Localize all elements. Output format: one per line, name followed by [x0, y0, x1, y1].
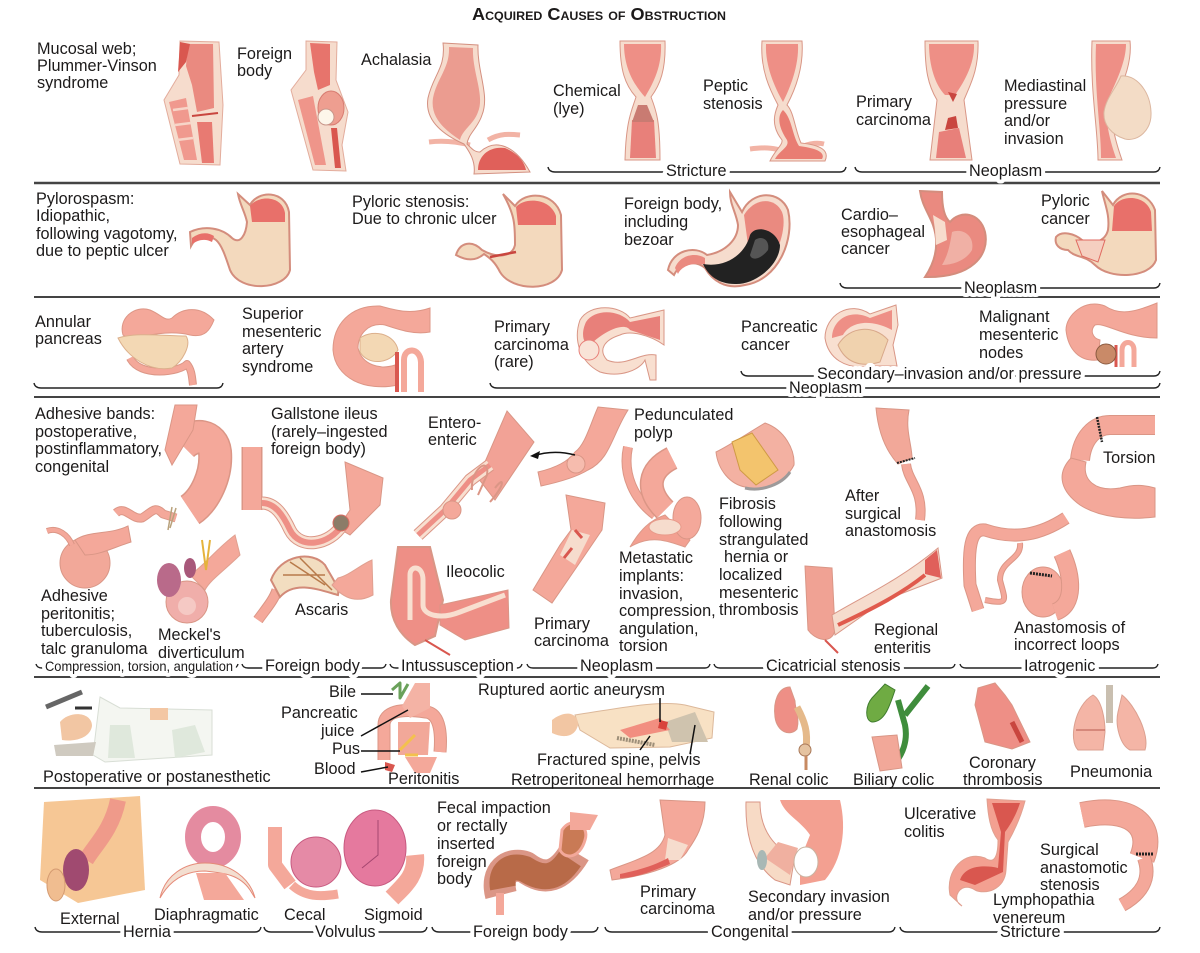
label: primary carcinoma: Primary: [856, 93, 913, 111]
label: gallstone ileus: foreign body): [271, 440, 366, 458]
bracket: neoplasm: Neoplasm: [580, 657, 653, 675]
label: metastatic implants: torsion: [619, 637, 668, 655]
illustration: primary small bowel carcinoma: [533, 495, 605, 603]
bracket: neoplasm: Neoplasm: [969, 162, 1042, 180]
illustration: malignant mesenteric nodes: [1066, 303, 1157, 367]
illustration: cecal volvulus: [275, 827, 341, 896]
label: adhesive peritonitis: Adhesive: [41, 587, 108, 605]
illustration: entero-enteric intussusception: [418, 411, 534, 535]
illustration: secondary invasion pelvis: [746, 800, 843, 885]
label: cecal: Cecal: [284, 906, 326, 924]
label: SMA syndrome: [242, 305, 321, 376]
label: surgical anastomotic stenosis: [1040, 841, 1128, 894]
label: adhesive peritonitis: talc granuloma: [41, 640, 149, 658]
label: lymphopathia venereum: venereum: [993, 909, 1065, 927]
label: malignant nodes: Malignant: [979, 308, 1050, 326]
illustration: heart: [975, 683, 1030, 749]
label: diaphragmatic: Diaphragmatic: [154, 906, 259, 924]
label: mediastinal: Mediastinal: [1004, 77, 1086, 95]
label: secondary invasion: [748, 888, 890, 924]
bracket: hernia: Hernia: [123, 923, 172, 941]
bracket: congenital: [605, 923, 895, 941]
label: coronary thrombosis: thrombosis: [963, 771, 1042, 789]
illustration: primary carcinoma of esophagus: [925, 41, 978, 160]
title: Acquired Causes of Obstruction: [472, 4, 726, 24]
label: primary carcinoma: [640, 883, 716, 918]
illustration: chemical stricture: [620, 41, 665, 160]
label: SMA syndrome: artery: [242, 340, 284, 358]
label: primary carcinoma rare: carcinoma: [494, 336, 570, 354]
label: fecal impaction: Fecal impaction: [437, 799, 551, 817]
bracket: volvulus: Volvulus: [315, 923, 376, 941]
label: lymphopathia venereum: [993, 891, 1095, 927]
label: metastatic implants: implants:: [619, 567, 684, 585]
panel: colonic obstruction: [35, 796, 1160, 941]
illustration: fecal impaction: [500, 812, 598, 915]
label: malignant nodes: [979, 308, 1058, 362]
label: mucosal web: [37, 40, 157, 92]
bracket: foreign body: Foreign body: [265, 657, 361, 675]
bracket: neoplasm: [840, 279, 1160, 297]
label: fibrosis: following: [719, 513, 782, 531]
label: mucosal web: Mucosal web;: [37, 40, 136, 58]
label: peptic stenosis: stenosis: [703, 95, 763, 113]
label: pancreatic cancer: [741, 318, 818, 354]
illustration: achalasia: [428, 43, 530, 174]
illustration: ileocolic intussusception: [391, 547, 509, 655]
illustration: fibrosis: [716, 423, 794, 489]
illustration: mucosal web: [164, 41, 223, 165]
illustration: bezoar stomach: [668, 192, 790, 286]
label: metastatic implants: [619, 549, 716, 655]
illustration: peptic stenosis: [750, 41, 826, 161]
label: primary carcinoma: [534, 615, 610, 650]
label: mucosal web: Plummer-Vinson: [37, 57, 157, 75]
illustration: postoperative patient: [46, 692, 212, 762]
label: peptic stenosis: [703, 77, 763, 113]
panel: small bowel text: [35, 405, 1158, 675]
label: adhesive bands: congenital: [35, 458, 109, 476]
illustration: mediastinal mass: [1092, 41, 1151, 160]
label: pancreatic cancer: Pancreatic: [741, 318, 818, 336]
label: sigmoid: Sigmoid: [364, 906, 423, 924]
illustration: lungs: [1073, 685, 1146, 750]
label: meckel: Meckel's: [158, 626, 221, 644]
label: metastatic implants: invasion,: [619, 585, 683, 603]
label: fecal impaction: or rectally: [437, 817, 508, 835]
label: adhesive peritonitis: tuberculosis,: [41, 622, 132, 640]
label: fecal impaction: foreign: [437, 853, 487, 871]
label: SMA syndrome: Superior: [242, 305, 304, 323]
illustration: gallstone ileus: [252, 447, 383, 543]
label: entero-enteric: [428, 414, 481, 449]
peritonitis callouts: Pus: [332, 740, 360, 758]
bracket: foreign body: [432, 923, 598, 941]
label: entero-enteric: enteric: [428, 431, 477, 449]
label: ulcerative colitis: colitis: [904, 823, 945, 841]
label: SMA syndrome: syndrome: [242, 358, 313, 376]
bracket: hernia: [35, 923, 261, 941]
label: foreign body bezoar: including: [624, 213, 688, 231]
bracket: cicatricial stenosis: [714, 657, 955, 675]
bracket: iatrogenic: Iatrogenic: [1024, 657, 1095, 675]
bracket: neoplasm: [855, 162, 1160, 180]
label: primary carcinoma: carcinoma: [534, 632, 610, 650]
label: metastatic implants: compression,: [619, 602, 716, 620]
panel: esophageal obstruction: [164, 41, 1151, 174]
label: surgical anastomotic stenosis: anastomotic: [1040, 859, 1128, 877]
label: primary carcinoma: Primary: [534, 615, 591, 633]
label: secondary invasion: Secondary invasion: [748, 888, 890, 906]
bracket: stricture: [548, 162, 846, 180]
peritonitis callouts: Bile: [329, 683, 356, 701]
label: fibrosis: strangulated: [719, 531, 808, 549]
label: SMA syndrome: mesenteric: [242, 323, 321, 341]
illustration: external hernia: [40, 796, 145, 903]
illustration: renal colic: [775, 687, 811, 770]
illustration: ascaris: [258, 557, 373, 620]
panel: adynamic causes: [43, 681, 1153, 789]
label: gallstone ileus: Gallstone ileus: [271, 405, 378, 423]
label: fractured spine: [511, 751, 714, 789]
bracket: neoplasm: Neoplasm: [789, 379, 862, 397]
bracket: stricture: Stricture: [1000, 923, 1061, 941]
label: cardio-esophageal: Cardio–: [841, 206, 899, 224]
label: foreign body bezoar: Foreign body,: [624, 195, 722, 213]
illustration: pedunculated polyp: [530, 407, 628, 486]
illustration: peritonitis abdomen: [384, 683, 440, 773]
bracket: foreign body: Foreign body: [473, 923, 569, 941]
label: adhesive bands: postinflammatory,: [35, 440, 162, 458]
label: ascaris: Ascaris: [295, 601, 348, 619]
label: after surgical anastomosis: [845, 487, 936, 540]
label: metastatic implants: angulation,: [619, 620, 699, 638]
label: primary carcinoma: carcinoma: [640, 900, 716, 918]
label: ulcerative colitis: Ulcerative: [904, 805, 976, 823]
illustration: pylorospasm stomach: [190, 194, 290, 286]
label: ruptured aortic aneurysm: Ruptured aortic aneurysm: [478, 681, 665, 699]
label: meckel: [158, 626, 245, 662]
label: regional enteritis: [874, 621, 938, 657]
label: mediastinal: pressure: [1004, 95, 1067, 113]
label: pylorospasm: due to peptic ulcer: [36, 242, 169, 260]
label: fractured spine: Retroperitoneal hemorrhage: [511, 771, 714, 789]
label: postoperative: Postoperative or postanesthetic: [43, 768, 271, 786]
label: malignant nodes: mesenteric: [979, 326, 1058, 344]
label: after surgical anastomosis: After: [845, 487, 880, 505]
label: pyloric stenosis: Pyloric stenosis:: [352, 193, 469, 211]
illustration: cardioesophageal cancer: [920, 191, 986, 277]
bracket: foreign body: [242, 657, 386, 675]
label: foreign body: body: [237, 62, 273, 80]
bracket: cicatricial stenosis: Cicatricial stenosis: [766, 657, 901, 675]
panel: small bowel obstruction: [47, 405, 1155, 655]
illustration: regional enteritis: [805, 548, 942, 653]
illustration: metastatic implants: [627, 447, 701, 547]
label: pyloric cancer: Pyloric: [1041, 192, 1090, 210]
label: surgical anastomotic stenosis: Surgical: [1040, 841, 1099, 859]
label: pedunculated polyp: [634, 406, 733, 442]
label: pylorospasm: following vagotomy,: [36, 225, 178, 243]
label: fibrosis: localized: [719, 566, 782, 584]
peritonitis callouts: juice: [320, 722, 354, 740]
label: pedunculated polyp: Pedunculated: [634, 406, 733, 424]
label: incorrect loops: incorrect loops: [1014, 636, 1120, 654]
label: mediastinal: and/or: [1004, 112, 1051, 130]
label: fibrosis: mesenteric: [719, 584, 798, 602]
label: pyloric stenosis: Due to chronic ulcer: [352, 210, 497, 228]
illustration: colon anastomosis: [969, 518, 1066, 610]
label: annular pancreas: pancreas: [35, 330, 102, 348]
bracket: secondary invasion: Secondary–invasion and/or pressure: [817, 365, 1082, 383]
bracket: congenital duodenal: [34, 383, 223, 388]
illustration: adhesive peritonitis: [47, 526, 131, 588]
bracket: congenital: Congenital: [711, 923, 789, 941]
illustration: surgical anastomosis: [876, 408, 921, 520]
arrow: [530, 451, 575, 459]
label: pyloric cancer: [1041, 192, 1090, 228]
illustration: adhesive bands: [116, 405, 215, 530]
label: incorrect loops: Anastomosis of: [1014, 619, 1126, 637]
label: ileocolic: Ileocolic: [446, 563, 505, 581]
label: peptic stenosis: Peptic: [703, 77, 748, 95]
label: foreign body: Foreign: [237, 45, 292, 63]
label: biliary colic: Biliary colic: [853, 771, 934, 789]
illustration: sigmoid volvulus: [344, 810, 415, 898]
label: coronary thrombosis: Coronary: [969, 754, 1037, 772]
label: cardio-esophageal: cancer: [841, 240, 890, 258]
label: chemical: [553, 82, 621, 118]
label: adhesive bands: Adhesive bands:: [35, 405, 155, 423]
illustration: primary duodenal carcinoma: [577, 308, 664, 380]
label: chemical: (lye): [553, 100, 585, 118]
label: regional enteritis: enteritis: [874, 639, 931, 657]
label: incorrect loops: [1014, 619, 1126, 654]
label: regional enteritis: Regional: [874, 621, 938, 639]
label: cardio-esophageal: esophageal: [841, 223, 925, 241]
label: primary carcinoma: [856, 93, 932, 129]
panel: esophageal text: [37, 40, 1160, 180]
illustration: superior mesenteric artery syndrome: [333, 306, 430, 392]
illustration: biliary colic: [867, 684, 928, 771]
illustration: pyloric cancer stomach: [1056, 191, 1156, 275]
label: secondary invasion: and/or pressure: [748, 906, 862, 924]
label: renal colic: Renal colic: [749, 771, 828, 789]
label: primary carcinoma rare: (rare): [494, 353, 534, 371]
panel: gastric obstruction: [190, 191, 1156, 287]
label: chemical: Chemical: [553, 82, 621, 100]
panel: duodenal text: [34, 305, 1160, 397]
label: gallstone ileus: [271, 405, 388, 458]
illustration: incorrect loops: [1022, 553, 1070, 617]
label: fecal impaction: [437, 799, 551, 888]
peritonitis callouts: Pancreatic: [281, 704, 358, 722]
label: gallstone ileus: (rarely–ingested: [271, 423, 388, 441]
label: foreign body: [237, 45, 292, 80]
peritonitis callouts: [281, 683, 459, 788]
label: fecal impaction: body: [437, 870, 473, 888]
label: annular pancreas: [35, 313, 102, 348]
bracket: neoplasm: Neoplasm: [964, 279, 1037, 297]
label: fibrosis: [719, 495, 808, 619]
label: pancreatic cancer: cancer: [741, 336, 790, 354]
label: pylorospasm: [36, 190, 178, 260]
label: fibrosis: Fibrosis: [719, 495, 776, 513]
label: lymphopathia venereum: Lymphopathia: [993, 891, 1095, 909]
label: primary carcinoma rare: [494, 318, 570, 371]
label: fibrosis: hernia or: [724, 548, 789, 566]
label: external: External: [60, 910, 120, 928]
label: primary carcinoma: carcinoma: [856, 111, 932, 129]
label: pyloric cancer: cancer: [1041, 210, 1090, 228]
label: cardio-esophageal: [841, 206, 925, 258]
illustration: diaphragmatic hernia: [160, 814, 255, 900]
label: mucosal web: syndrome: [37, 74, 108, 92]
bracket: volvulus: [264, 923, 427, 941]
label: pneumonia: Pneumonia: [1070, 763, 1153, 781]
label: ulcerative colitis: [904, 805, 976, 841]
label: annular pancreas: Annular: [35, 313, 92, 331]
label: adhesive bands: postoperative,: [35, 423, 137, 441]
bracket: secondary invasion: [741, 365, 1160, 383]
label: malignant nodes: nodes: [979, 344, 1023, 362]
panel: duodenal obstruction: [118, 303, 1157, 392]
label: entero-enteric: Entero-: [428, 414, 481, 432]
label: pylorospasm: Idiopathic,: [36, 207, 110, 225]
bracket: intussusception: Intussusception: [401, 657, 514, 675]
label: adhesive bands: [35, 405, 162, 476]
label: foreign body bezoar: [624, 195, 722, 249]
label: pylorospasm: Pylorospasm:: [36, 190, 134, 208]
illustration: pyloric stenosis stomach: [456, 194, 562, 287]
label: achalasia: Achalasia: [361, 51, 432, 69]
panel: gastric text: [36, 190, 1160, 297]
illustration: pancreatic cancer: [825, 305, 898, 367]
illustration: ulcerative colitis: [949, 799, 1025, 906]
illustration: meckel diverticulum: [157, 535, 240, 623]
illustration: retroperitoneal body: [552, 698, 714, 754]
peritonitis callouts: Blood: [314, 760, 356, 778]
bracket: stricture: [900, 923, 1160, 941]
label: coronary thrombosis: [963, 754, 1042, 789]
illustration: primary colon carcinoma: [610, 800, 705, 880]
bracket: neoplasm: [490, 379, 1160, 397]
label: torsion: Torsion: [1103, 449, 1155, 467]
label: metastatic implants: Metastatic: [619, 549, 693, 567]
bracket: neoplasm: [527, 657, 710, 675]
bracket: stricture: Stricture: [666, 162, 727, 180]
label: after surgical anastomosis: anastomosis: [845, 522, 936, 540]
illustration: torsion: [1062, 417, 1155, 518]
label: fibrosis: thrombosis: [719, 601, 798, 619]
illustration: foreign body: [291, 41, 348, 171]
label: surgical anastomotic stenosis: stenosis: [1040, 876, 1100, 894]
label: foreign body bezoar: bezoar: [624, 231, 674, 249]
bracket: iatrogenic: [960, 657, 1158, 675]
illustration: anastomotic stenosis: [1082, 812, 1154, 905]
label: after surgical anastomosis: surgical: [845, 505, 901, 523]
label: fecal impaction: inserted: [437, 835, 495, 853]
label: mediastinal: invasion: [1004, 130, 1064, 148]
bracket: compression: Compression, torsion, angulation: [45, 658, 233, 674]
label: adhesive peritonitis: [41, 587, 149, 658]
label: fractured spine: Fractured spine, pelvis: [537, 751, 700, 769]
illustration: annular pancreas: [118, 309, 214, 385]
label: primary carcinoma rare: Primary: [494, 318, 551, 336]
label: primary carcinoma: Primary: [640, 883, 697, 901]
peritonitis callouts: Peritonitis: [388, 770, 459, 788]
label: mediastinal: [1004, 77, 1086, 148]
label: pyloric stenosis: [352, 193, 497, 228]
label: pedunculated polyp: polyp: [634, 424, 673, 442]
label: adhesive peritonitis: peritonitis;: [41, 605, 115, 623]
label: meckel: diverticulum: [158, 644, 245, 662]
